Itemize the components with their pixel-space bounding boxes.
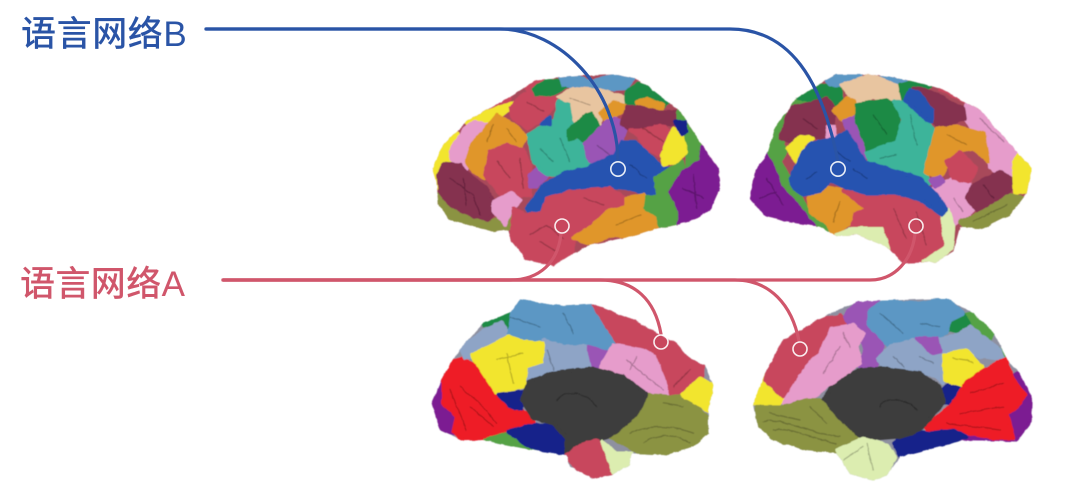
brain: left hemisphere lateral view xyxy=(432,74,721,267)
language network A region xyxy=(593,305,703,395)
marker rings on the brains xyxy=(555,162,923,356)
language network B region xyxy=(790,132,947,215)
label: language network A: 语言网络A xyxy=(20,265,186,304)
language network A region xyxy=(765,317,847,397)
brain: right hemisphere medial view xyxy=(752,297,1034,481)
brain: right hemisphere lateral view xyxy=(749,73,1032,264)
language network B region xyxy=(527,142,670,217)
connector lines: language network B xyxy=(206,29,838,162)
language network A region xyxy=(843,190,947,262)
language network A region xyxy=(512,188,627,265)
connector lines: language network A xyxy=(223,234,915,341)
label: language network B: 语言网络B xyxy=(21,15,187,54)
brain: left hemisphere medial view xyxy=(431,298,714,480)
